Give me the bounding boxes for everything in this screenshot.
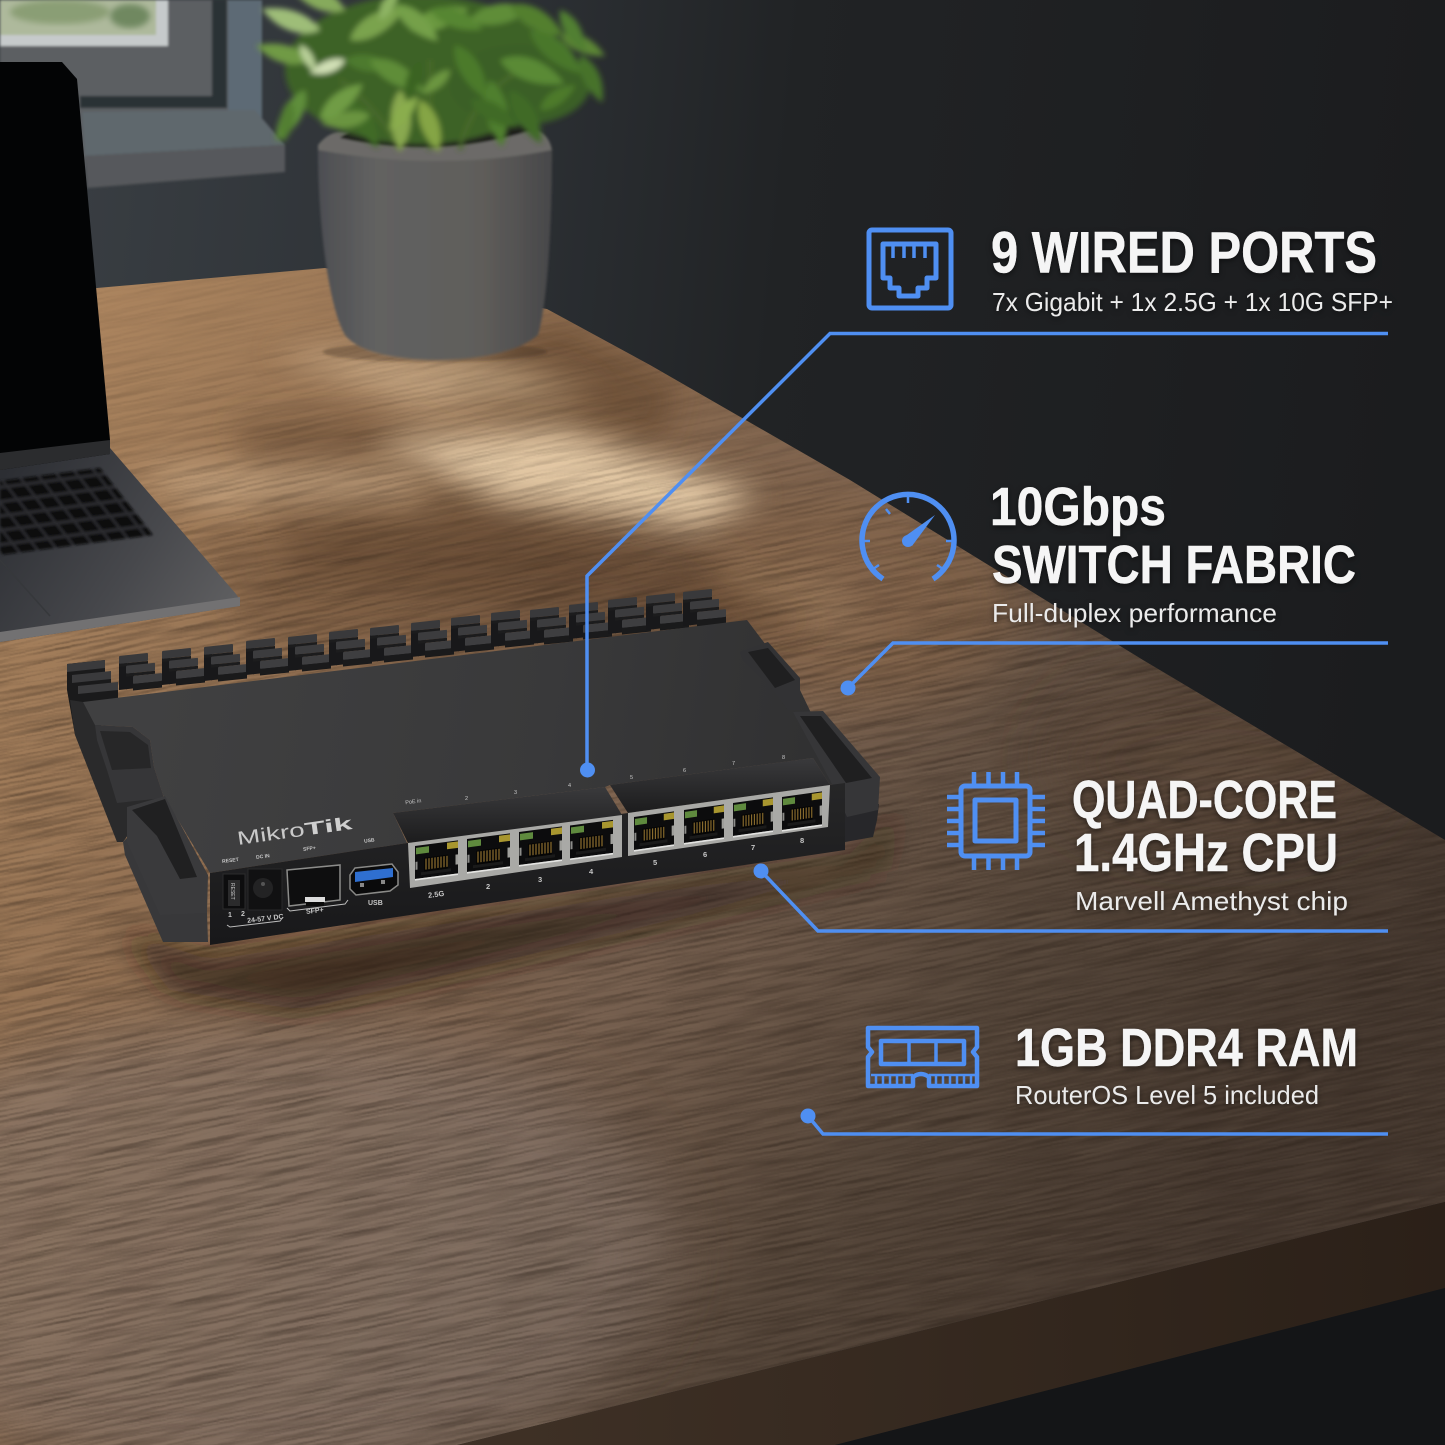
top port labels: 5 — [630, 775, 633, 781]
detail: port mix: 7x Gigabit + 1x 2.5G + 1x 10G SFP+ — [992, 287, 1393, 317]
right lower rail — [845, 804, 879, 842]
port number labels: 2.5G — [428, 889, 445, 900]
back left clip — [95, 725, 164, 803]
callout line: RAM — [800, 1108, 1388, 1134]
heading: switch fabric — [990, 477, 1356, 628]
front connector labels: SFP+ — [306, 907, 324, 916]
front connector labels: SFP+ — [303, 845, 316, 853]
power jack — [248, 869, 282, 910]
port number labels: 7 — [751, 843, 755, 852]
MikroTik logo — [236, 813, 355, 850]
USB port — [350, 864, 398, 895]
heading: switch fabric: 10Gbps — [990, 477, 1166, 537]
port number labels: 2 — [486, 882, 490, 891]
front connector labels: 2 — [241, 911, 245, 918]
front connector labels: 24-57 V DC — [247, 914, 284, 925]
port number labels: 5 — [653, 858, 657, 867]
front left clip — [127, 796, 208, 915]
icon: RAM module — [868, 1028, 977, 1086]
top port labels: 7 — [732, 761, 735, 767]
laptop base — [0, 448, 240, 642]
detail: license: RouterOS Level 5 included — [1015, 1080, 1319, 1110]
heading: RAM — [1015, 1018, 1358, 1110]
heatsink fins — [67, 587, 726, 735]
laptop keyboard — [0, 468, 153, 555]
front panel — [210, 783, 845, 945]
front connector labels: USB — [368, 900, 383, 907]
router lower left base — [123, 838, 208, 942]
reset button — [223, 874, 245, 909]
heading: CPU: QUAD-CORE — [1072, 770, 1337, 830]
MikroTik logo: Mikro — [236, 820, 306, 850]
plant pot — [318, 120, 552, 362]
front connector labels: RESET — [222, 857, 239, 865]
heading: 9 wired ports — [991, 220, 1393, 317]
callout line: wired ports — [580, 334, 1388, 778]
top port labels: 2 — [465, 796, 468, 802]
back right clip — [740, 642, 800, 710]
detail: duplex: Full-duplex performance — [992, 598, 1277, 628]
top port labels — [405, 755, 785, 806]
reset button: RESET — [229, 883, 235, 900]
laptop — [0, 62, 240, 642]
icon: speed gauge — [862, 494, 954, 579]
dark floor corner — [835, 1288, 1445, 1445]
front connector labels — [222, 837, 383, 927]
top port labels: 8 — [782, 755, 785, 761]
detail: chip: Marvell Amethyst chip — [1075, 886, 1348, 916]
callout line: switch fabric — [840, 643, 1388, 696]
router left side wall — [70, 700, 160, 842]
top port labels: 4 — [568, 783, 571, 789]
plant foliage — [254, 0, 611, 155]
heading: CPU: 1.4GHz CPU — [1074, 823, 1338, 883]
top port labels: PoE in — [405, 798, 422, 806]
router ground shadow — [120, 800, 900, 1010]
heading: 9 wired ports: 9 WIRED PORTS — [991, 220, 1377, 286]
front connector labels: 1 — [228, 912, 232, 919]
port number labels: 8 — [800, 836, 804, 845]
callout line: CPU — [754, 864, 1388, 931]
SFP cage — [287, 865, 340, 906]
heading: CPU — [1072, 770, 1348, 916]
top port labels: 3 — [514, 790, 517, 796]
port number labels: 6 — [703, 850, 707, 859]
port number labels: 4 — [589, 867, 594, 876]
front connector labels: DC IN — [256, 853, 270, 861]
port number labels — [428, 836, 804, 900]
front right clip — [793, 711, 880, 817]
heading: switch fabric: SWITCH FABRIC — [992, 535, 1356, 595]
port block left — [393, 787, 622, 888]
front connector labels: USB — [364, 837, 375, 845]
icon: ethernet port — [869, 230, 951, 308]
MikroTik logo: Tik — [303, 813, 355, 839]
port number labels: 3 — [538, 875, 542, 884]
router device — [67, 587, 880, 945]
port block right — [610, 758, 830, 856]
desk front edge — [457, 1202, 1445, 1445]
icon: CPU chip — [947, 772, 1045, 870]
window in background — [0, 0, 285, 188]
top port labels: 6 — [683, 768, 686, 774]
laptop screen — [0, 62, 110, 470]
top plate — [83, 620, 845, 873]
heading: RAM: 1GB DDR4 RAM — [1015, 1018, 1358, 1078]
